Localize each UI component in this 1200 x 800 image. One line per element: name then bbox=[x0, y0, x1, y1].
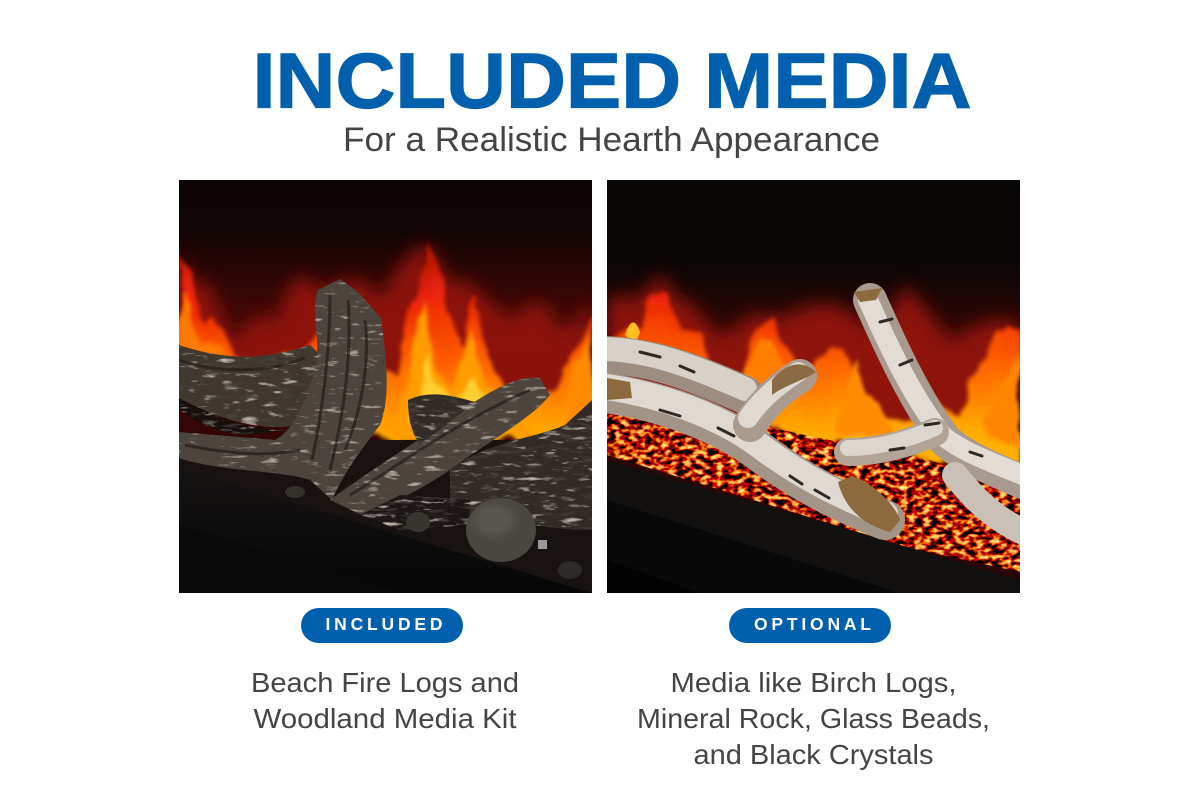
badge: optional bbox=[729, 608, 891, 643]
main left log bbox=[600, 392, 885, 520]
text block: included description: Beach Fire Logs and bbox=[251, 667, 519, 698]
tray bbox=[607, 460, 1020, 593]
text block: optional description: and Black Crystals bbox=[694, 739, 934, 770]
panel: optional photo of birch logs bbox=[600, 180, 1030, 593]
tray bbox=[179, 518, 591, 593]
logs bbox=[179, 279, 592, 530]
glowing glass bed bbox=[607, 407, 1020, 572]
birch logs bbox=[600, 300, 1030, 535]
text block: included description: Woodland Media Kit bbox=[254, 703, 517, 734]
text block: included description bbox=[251, 667, 519, 734]
text block: optional description bbox=[637, 667, 990, 770]
badge: included bbox=[301, 608, 463, 643]
floor bbox=[179, 440, 592, 593]
badge: included: INCLUDED bbox=[326, 614, 442, 634]
right long log bbox=[870, 300, 1030, 485]
upper left log bbox=[600, 355, 745, 395]
rising branch bbox=[750, 376, 800, 425]
flames bbox=[179, 240, 592, 440]
rocks bbox=[466, 498, 536, 562]
lower right stub bbox=[955, 475, 1030, 535]
bark shading bbox=[179, 295, 530, 495]
text block: optional description: Media like Birch Logs, bbox=[670, 667, 956, 698]
panel: included photo of fire logs bbox=[179, 180, 592, 593]
subtitle: For a Realistic Hearth Appearance bbox=[343, 121, 880, 159]
log end grain bbox=[772, 364, 816, 395]
text block: optional description: Mineral Rock, Glass Beads, bbox=[637, 703, 990, 734]
title: INCLUDED MEDIA bbox=[252, 36, 972, 124]
birch bark marks bbox=[640, 319, 982, 498]
right low branch bbox=[848, 432, 935, 452]
flames bbox=[607, 277, 1020, 470]
badge: optional: OPTIONAL bbox=[754, 614, 871, 634]
